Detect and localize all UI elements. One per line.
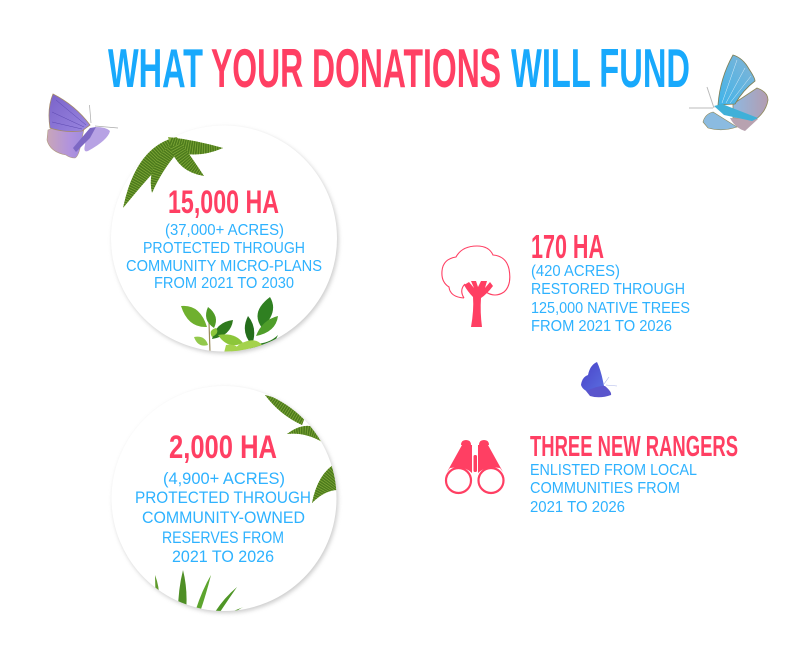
- description: PROTECTED THROUGH: [143, 240, 305, 257]
- fern and grass: [155, 395, 338, 612]
- panel: three new rangers: COMMUNITIES FROM: [530, 480, 680, 497]
- panel: 170 ha: FROM 2021 TO 2026: [531, 318, 672, 335]
- title: WHAT: [108, 37, 203, 99]
- panel: 170 ha: (420 ACRES): [531, 263, 620, 280]
- description: (37,000+ ACRES): [165, 222, 284, 239]
- panel: 170 ha: RESTORED THROUGH: [531, 281, 685, 298]
- description: (4,900+ ACRES): [163, 470, 285, 488]
- panel: 170 ha: [531, 228, 690, 335]
- panel: 170 ha: 125,000 NATIVE TREES: [531, 300, 690, 317]
- description: RESERVES FROM: [162, 529, 284, 547]
- fern sprig: [123, 137, 223, 208]
- icon: purple butterfly top left: [47, 94, 118, 158]
- panel: 2,000 ha circle: [112, 386, 338, 613]
- description: [126, 222, 322, 292]
- panel: 15,000 ha circle: [111, 126, 338, 355]
- stat: 2,000 HA: [169, 429, 277, 465]
- description: COMMUNITY MICRO-PLANS: [126, 258, 322, 275]
- leaves: [181, 297, 278, 355]
- description: [135, 470, 311, 566]
- icon: blue butterfly top right: [689, 55, 768, 131]
- icon: tree: [442, 246, 510, 327]
- panel: 170 ha: 170 HA: [531, 228, 604, 265]
- description: 2021 TO 2026: [172, 548, 274, 566]
- panel: three new rangers: [530, 431, 738, 516]
- icon: small blue butterfly: [581, 362, 617, 397]
- title: YOUR DONATIONS: [211, 37, 501, 99]
- icon: binoculars: [446, 440, 504, 493]
- stat: 15,000 HA: [168, 184, 279, 220]
- panel: three new rangers: ENLISTED FROM LOCAL: [530, 462, 697, 479]
- description: COMMUNITY-OWNED: [142, 509, 305, 527]
- description: FROM 2021 TO 2030: [154, 275, 294, 292]
- description: PROTECTED THROUGH: [135, 489, 311, 507]
- panel: three new rangers: 2021 TO 2026: [530, 499, 625, 516]
